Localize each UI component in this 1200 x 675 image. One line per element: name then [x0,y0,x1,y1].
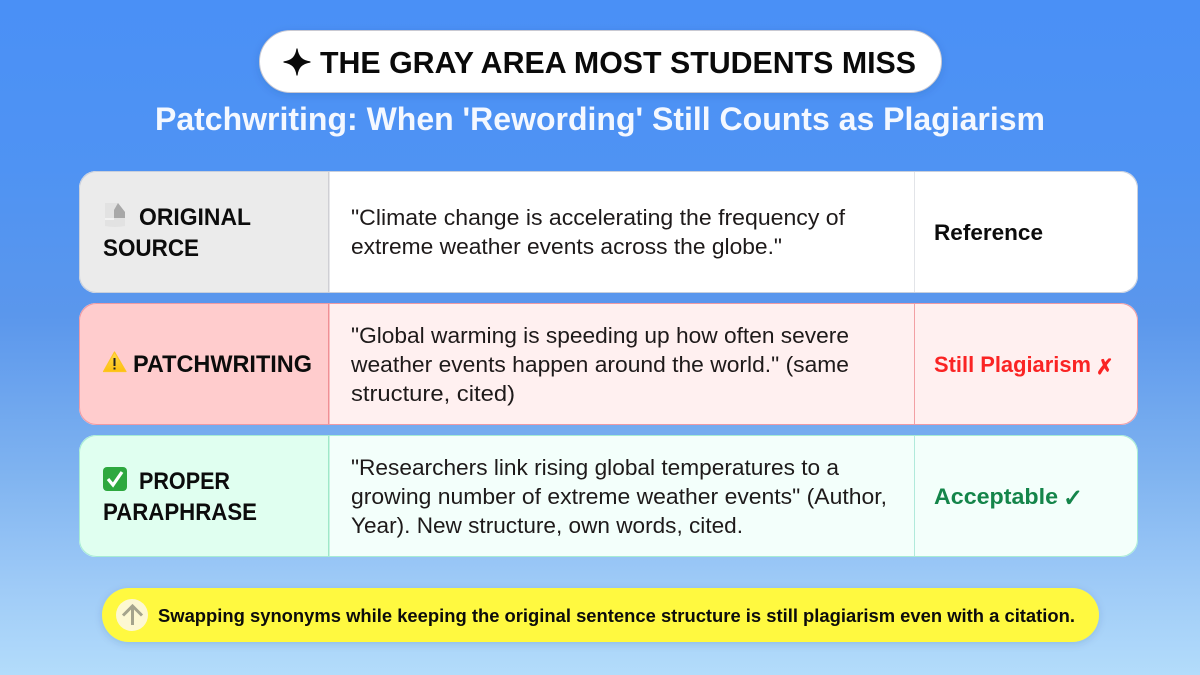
panel: patchwriting row [79,303,1138,425]
patchwriting example [350,323,849,406]
patchwriting example: structure, cited) [351,381,515,406]
label [103,204,251,262]
callout text: Swapping synonyms while keeping the original sentence structure is still plagiarism even with a citation. [158,606,1075,626]
verdict: still plagiarism: Still Plagiarism [934,352,1091,377]
callout bar [102,588,1099,642]
paraphrase example: "Researchers link rising global temperatures to a [351,455,840,480]
label: PROPER [139,468,230,495]
label [103,468,257,526]
panel: original source row [79,171,1138,293]
patchwriting example: "Global warming is speeding up how often severe [351,323,849,348]
patchwriting example: weather events happen around the world." (same [350,352,849,377]
title text: THE GRAY AREA MOST STUDENTS MISS [320,46,916,80]
icon: document [105,203,125,227]
source quote [351,205,846,259]
title badge [260,30,942,92]
icon: warning [104,352,126,372]
verdict: acceptable: Acceptable [934,484,1058,509]
subtitle: Patchwriting: When 'Rewording' Still Counts as Plagiarism [155,101,1045,137]
source quote: extreme weather events across the globe." [351,234,782,259]
verdict: reference: Reference [934,220,1043,245]
source quote: "Climate change is accelerating the frequency of [351,205,846,230]
icon: up arrow [116,599,148,631]
verdict: still plagiarism: ✗ [1096,355,1114,379]
label: PARAPHRASE [103,499,257,526]
verdict: acceptable: ✓ [1063,484,1083,512]
icon: sparkle [284,49,310,75]
paraphrase example [351,455,887,538]
label: SOURCE [103,235,199,262]
label: ORIGINAL [139,204,251,231]
label: PATCHWRITING [133,351,312,378]
icon: check box [103,467,127,491]
panel: proper paraphrase row [79,435,1138,557]
paraphrase example: growing number of extreme weather events" (Author, [351,484,887,509]
paraphrase example: Year). New structure, own words, cited. [351,513,743,538]
